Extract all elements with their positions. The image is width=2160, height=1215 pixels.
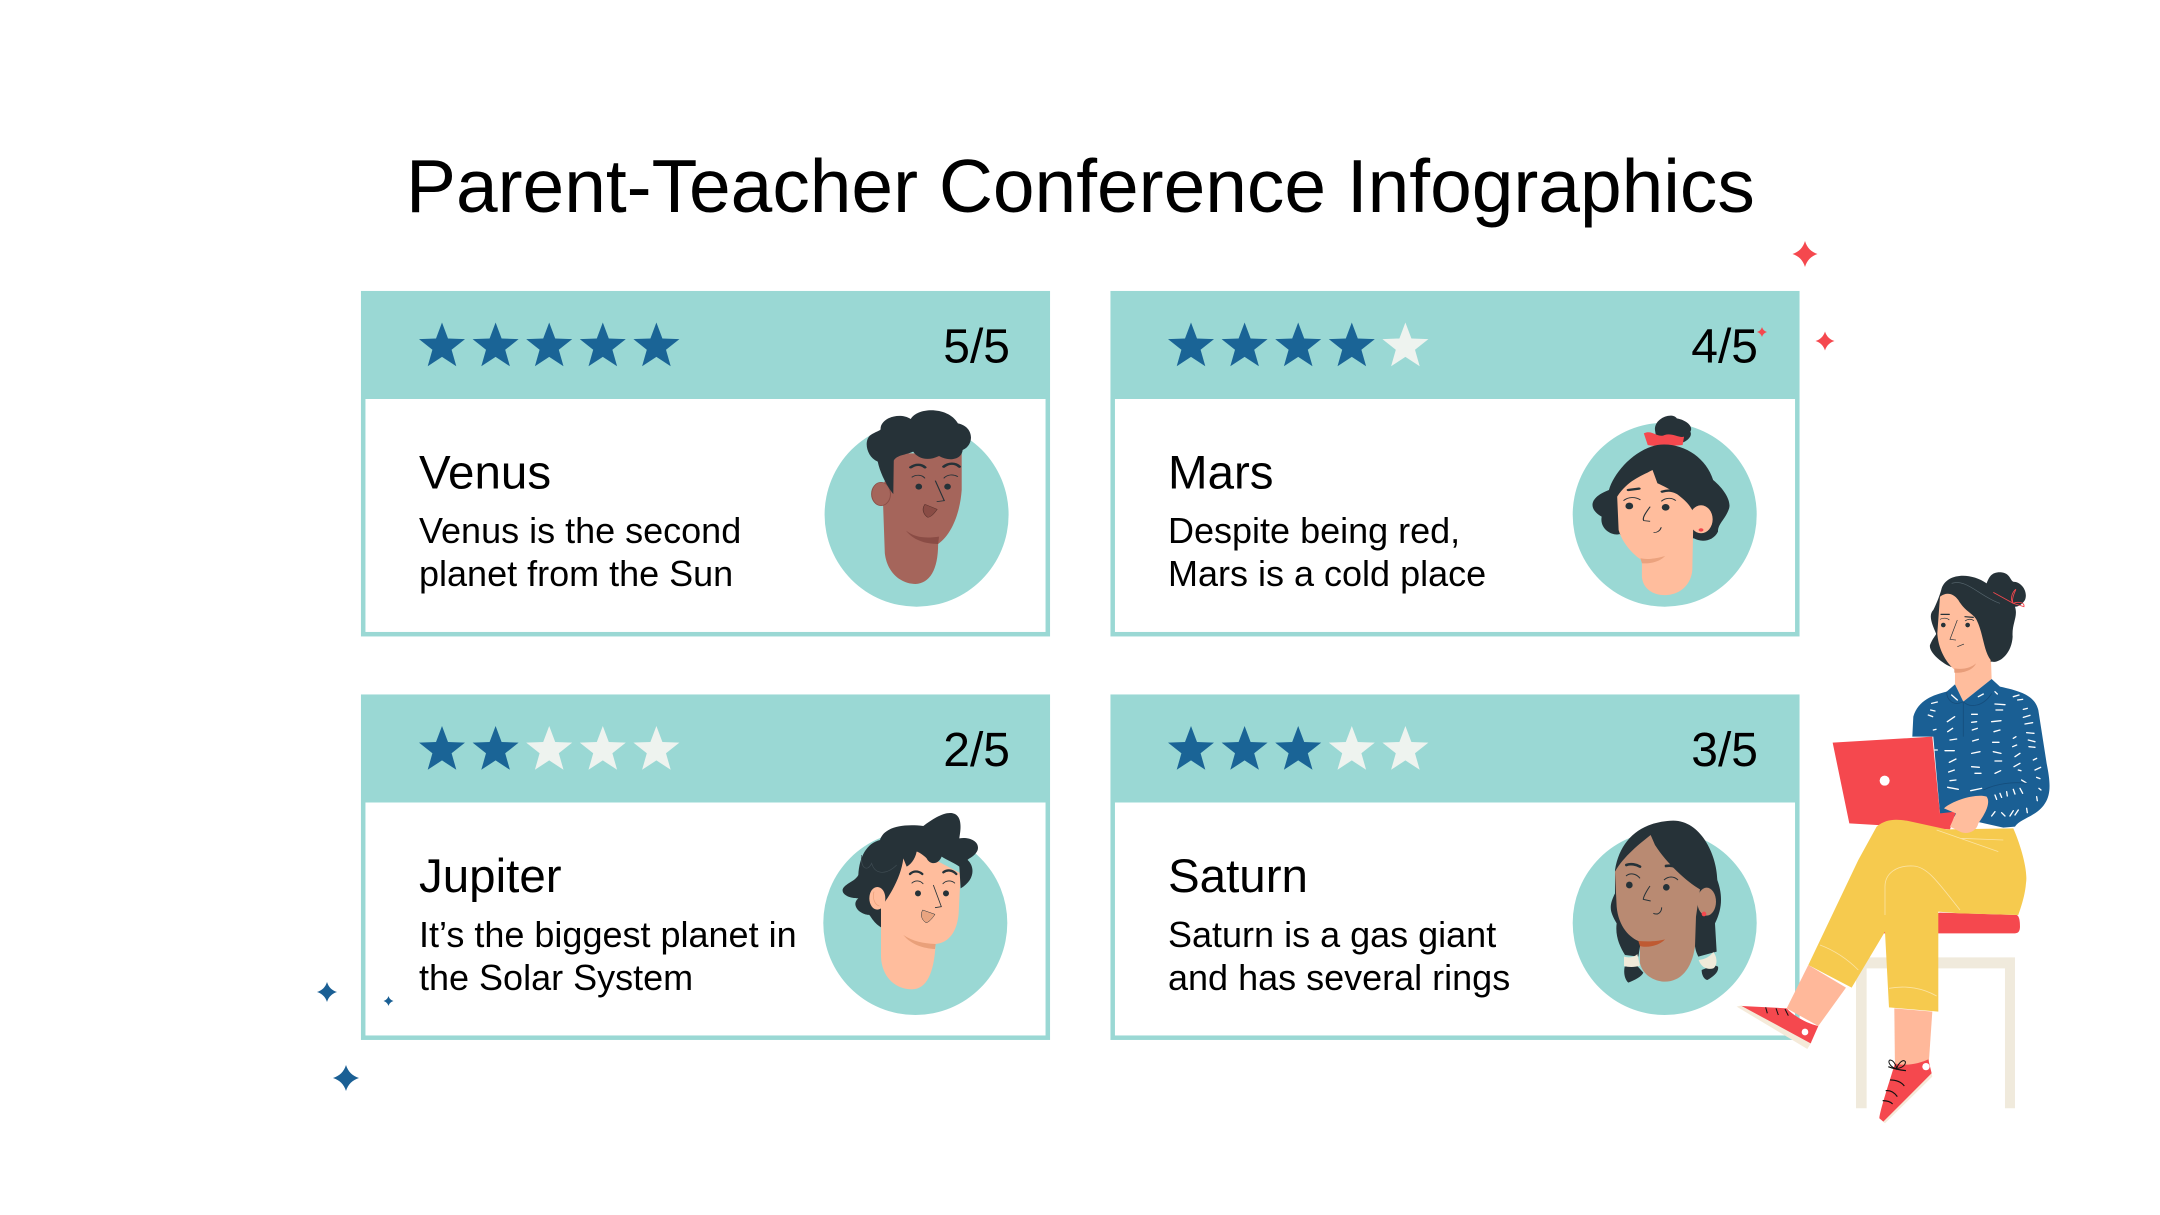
description: Saturn: and has several rings (1168, 957, 1510, 998)
trousers (1808, 820, 2026, 1012)
name: Jupiter: Jupiter (419, 850, 562, 903)
front leg and shoe (1879, 1008, 1932, 1123)
description: Saturn: Saturn is a gas giant (1168, 914, 1496, 955)
star rating: 3 of 5 (1168, 726, 1428, 770)
sparkles: blue (317, 982, 394, 1091)
shirt (1912, 679, 2050, 828)
name: Venus: Venus (419, 446, 551, 500)
description: Venus: planet from the Sun (419, 553, 733, 594)
header band: Jupiter (361, 694, 1050, 802)
chair (1856, 913, 2020, 1108)
description: Jupiter: the Solar System (419, 957, 693, 998)
header band: Mars (1110, 291, 1800, 399)
score: Jupiter: 2/5 (943, 724, 1010, 777)
laptop (1833, 737, 1956, 829)
title: Parent-Teacher Conference Infographics (406, 144, 1755, 228)
score: Mars: 4/5 (1691, 320, 1758, 374)
neck (1955, 650, 1992, 702)
avatar: Mars (1573, 416, 1757, 607)
star rating: 4 of 5 (1168, 322, 1428, 366)
description: Jupiter: It’s the biggest planet in (419, 914, 797, 955)
avatar: Saturn (1573, 821, 1757, 1015)
description: Mars: Mars is a cold place (1168, 553, 1486, 594)
illustration: woman on chair with laptop (1737, 572, 2050, 1123)
header band: Saturn (1110, 694, 1800, 802)
description: Venus: Venus is the second (419, 510, 741, 551)
name: Mars: Mars (1168, 446, 1274, 500)
score: Saturn: 3/5 (1691, 724, 1758, 777)
hair (1930, 572, 2026, 667)
description: Mars: Despite being red, (1168, 510, 1460, 551)
panel: Jupiter (361, 694, 1050, 1038)
panel: Saturn (1110, 694, 1800, 1038)
back leg and shoe (1737, 965, 1846, 1049)
panel: Venus (361, 291, 1050, 634)
avatar: Jupiter (823, 813, 1007, 1015)
star rating: 2 of 5 (419, 726, 679, 770)
face (1937, 594, 1991, 675)
header band: Venus (361, 291, 1050, 399)
name: Saturn: Saturn (1168, 850, 1308, 903)
score: Venus: 5/5 (943, 320, 1010, 374)
sparkles: red (1757, 241, 1834, 350)
panel: Mars (1110, 291, 1800, 634)
hand (1944, 796, 1988, 833)
shirt pattern (1928, 692, 2041, 816)
star rating: 5 of 5 (419, 322, 679, 366)
avatar: Venus (825, 410, 1009, 607)
upper body (1833, 572, 2050, 829)
